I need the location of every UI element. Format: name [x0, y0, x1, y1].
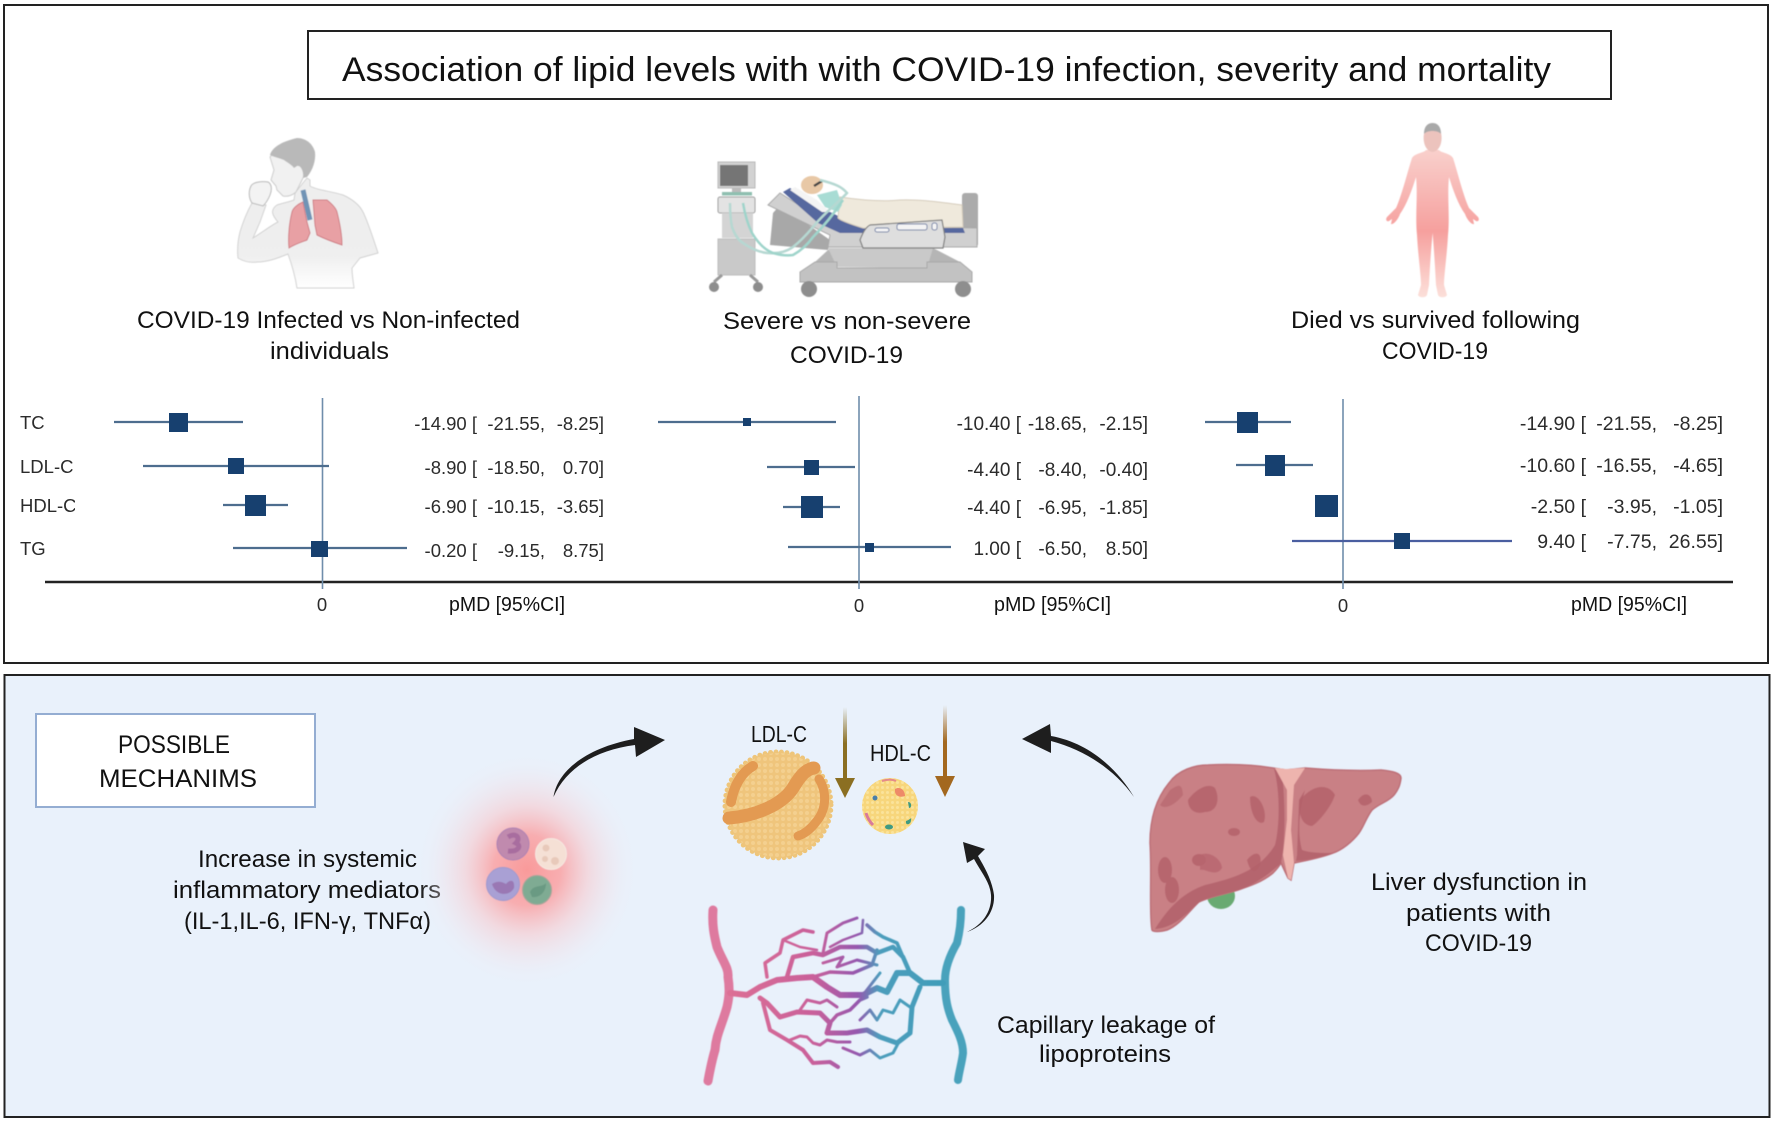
heading: infected vs non-infected — [137, 307, 520, 365]
artery trunk — [708, 910, 729, 1081]
bed side rail — [860, 220, 945, 248]
values: severe vs non-severe: -4.40 [ — [967, 498, 1022, 519]
heading: severe vs non-severe: COVID-19 — [790, 342, 903, 369]
values: died vs survived: -7.75, — [1607, 531, 1657, 553]
icon: ventilator and hospital bed — [709, 162, 978, 297]
values: infected vs non-infected: -8.25] — [557, 413, 604, 434]
label box: possible mechanisms: MECHANIMS — [99, 765, 257, 793]
text: liver dysfunction: COVID-19 — [1425, 930, 1532, 957]
values: severe vs non-severe: -1.85] — [1099, 498, 1148, 519]
forest plot: died vs survived — [1205, 399, 1723, 616]
row labels: TC — [20, 412, 45, 433]
icon: human body — [1386, 123, 1479, 297]
values: severe vs non-severe: -0.40] — [1099, 460, 1148, 481]
heading: died vs survived: Died vs survived following — [1291, 307, 1580, 334]
icon: coughing man with lungs — [238, 138, 378, 288]
cell: magenta — [497, 828, 529, 860]
values: infected vs non-infected: 8.75] — [563, 540, 604, 561]
title — [308, 31, 1611, 99]
heading: infected vs non-infected: COVID-19 Infected vs Non-infected — [137, 307, 520, 334]
label box: possible mechanisms — [36, 714, 315, 807]
values: infected vs non-infected: -18.50, — [487, 457, 545, 478]
forest plot: severe vs non-severe: 0 — [854, 595, 864, 616]
values: died vs survived: -16.55, — [1596, 455, 1657, 477]
text: systemic inflammatory mediators: inflammatory mediators — [173, 877, 441, 904]
icon: capillary network — [708, 910, 963, 1081]
heading: infected vs non-infected: individuals — [270, 338, 389, 365]
values: severe vs non-severe: -2.15] — [1099, 414, 1148, 435]
text: capillary leakage — [997, 1012, 1215, 1068]
values: infected vs non-infected: -14.90 [ — [414, 413, 477, 434]
values: infected vs non-infected: -6.90 [ — [425, 496, 477, 517]
values: infected vs non-infected: -9.15, — [498, 540, 545, 561]
values: severe vs non-severe: 8.50] — [1106, 539, 1148, 560]
panel: lipid association forest plots — [4, 5, 1768, 663]
arrow: inflammation to lipoproteins — [554, 727, 665, 797]
text: systemic inflammatory mediators: (IL-1,IL-6, IFN-γ, TNFα) — [184, 908, 431, 935]
forest plot: died vs survived: pMD [95%CI] — [1571, 594, 1687, 616]
values: died vs survived: -2.50 [ — [1531, 496, 1587, 518]
values: died vs survived: -1.05] — [1673, 496, 1723, 518]
values: infected vs non-infected — [414, 413, 604, 561]
heading: severe vs non-severe — [723, 308, 971, 369]
forest plot: infected vs non-infected — [114, 398, 604, 616]
liver lesions — [1158, 786, 1372, 903]
values: severe vs non-severe: -10.40 [ — [957, 414, 1022, 435]
values: infected vs non-infected: -8.90 [ — [425, 457, 477, 478]
values: died vs survived: -10.60 [ — [1520, 455, 1587, 477]
values: infected vs non-infected: -10.15, — [487, 496, 545, 517]
patient — [801, 176, 963, 228]
icon: liver — [1150, 765, 1401, 932]
text: systemic inflammatory mediators — [173, 846, 441, 935]
forest plot: severe vs non-severe: pMD [95%CI] — [994, 594, 1111, 616]
values: died vs survived: -3.95, — [1607, 496, 1657, 518]
values: died vs survived: -4.65] — [1673, 455, 1723, 477]
values: severe vs non-severe — [957, 414, 1148, 560]
axis baseline — [45, 581, 1733, 583]
title: Association of lipid levels with with COVID-19 infection, severity and mortality — [342, 51, 1551, 89]
values: severe vs non-severe: -18.65, — [1028, 414, 1087, 435]
vein trunk — [945, 910, 963, 1080]
heading: severe vs non-severe: Severe vs non-severe — [723, 308, 971, 335]
values: died vs survived: -14.90 [ — [1520, 413, 1587, 435]
values: infected vs non-infected: -21.55, — [487, 413, 545, 434]
values: died vs survived: -21.55, — [1596, 413, 1657, 435]
bed — [768, 187, 978, 297]
arrow: capillaries to lipoproteins — [963, 842, 994, 932]
row labels — [20, 412, 80, 559]
text: liver dysfunction — [1371, 869, 1587, 957]
row labels: LDL-C — [20, 456, 73, 477]
values: severe vs non-severe: 1.00 [ — [973, 539, 1022, 560]
forest plot: died vs survived: 0 — [1338, 595, 1348, 616]
arrow: LDL-C decrease — [835, 707, 855, 798]
values: infected vs non-infected: -3.65] — [557, 496, 604, 517]
panel: possible mechanisms — [4, 675, 1770, 1117]
label: HDL-C: HDL-C — [870, 740, 931, 766]
label box: possible mechanisms: POSSIBLE — [118, 731, 230, 759]
values: infected vs non-infected: 0.70] — [563, 457, 604, 478]
ventilator — [709, 162, 763, 292]
falciform ligament — [1275, 768, 1305, 880]
icon: inflammatory cells with glow — [415, 752, 639, 988]
row labels: HDL-C — [20, 495, 77, 516]
values: died vs survived — [1520, 413, 1723, 553]
text: systemic inflammatory mediators: Increase in systemic — [198, 846, 417, 873]
cell: green — [522, 876, 552, 904]
ventilator tubes — [730, 180, 847, 253]
values: severe vs non-severe: -8.40, — [1038, 460, 1087, 481]
liver lower rim — [1155, 769, 1284, 929]
values: died vs survived: -8.25] — [1673, 413, 1723, 435]
forest plot: infected vs non-infected: 0 — [317, 594, 327, 615]
text: capillary leakage: Capillary leakage of — [997, 1012, 1215, 1039]
icon: HDL particle — [862, 778, 918, 834]
heading: died vs survived: COVID-19 — [1382, 338, 1488, 365]
icon: LDL particle — [725, 752, 831, 858]
arrow: HDL-C decrease — [935, 705, 955, 797]
cell: violet — [486, 868, 520, 900]
values: severe vs non-severe: -4.40 [ — [967, 460, 1022, 481]
text: liver dysfunction: patients with — [1406, 900, 1551, 927]
values: severe vs non-severe: -6.95, — [1038, 498, 1087, 519]
values: severe vs non-severe: -6.50, — [1038, 539, 1087, 560]
values: died vs survived: 26.55] — [1669, 531, 1723, 553]
arrow: liver to lipoproteins — [1022, 724, 1134, 797]
label: LDL-C: LDL-C — [751, 721, 807, 747]
heading: died vs survived — [1291, 307, 1580, 365]
capillary branches — [730, 918, 943, 1067]
text: capillary leakage: lipoproteins — [1039, 1041, 1171, 1068]
text: liver dysfunction: Liver dysfunction in — [1371, 869, 1587, 896]
values: infected vs non-infected: -0.20 [ — [425, 540, 477, 561]
values: died vs survived: 9.40 [ — [1537, 531, 1587, 553]
row labels: TG — [20, 538, 46, 559]
forest plot: severe vs non-severe — [658, 396, 1148, 616]
forest plot: infected vs non-infected: pMD [95%CI] — [449, 594, 565, 616]
cell: beige — [536, 838, 566, 870]
